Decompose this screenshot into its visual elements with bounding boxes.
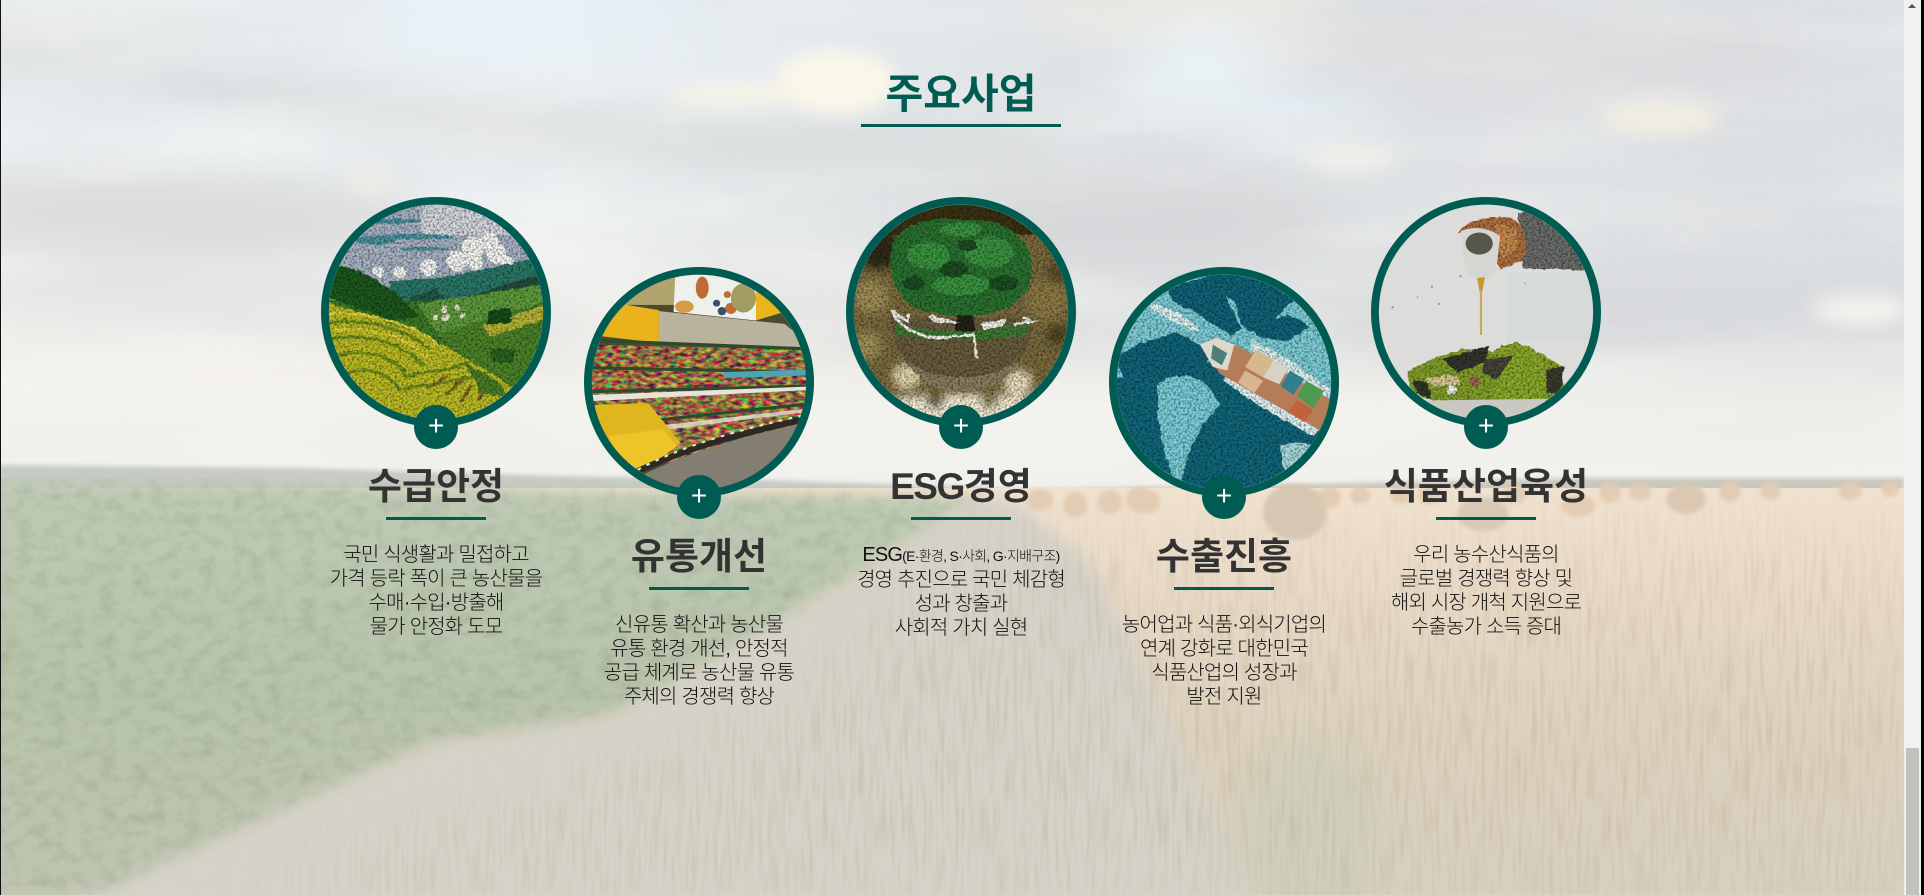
text block: 연계 강화로 대한민국 (1140, 638, 1308, 660)
text block: 글로벌 경쟁력 향상 및 (1400, 568, 1572, 590)
shelves (584, 345, 814, 464)
panel: 수급안정 (321, 197, 551, 638)
title (861, 71, 1061, 127)
icon: plus button: + (1216, 480, 1232, 511)
heading: 유통개선: 유통개선 (631, 536, 767, 577)
distant treeline (0, 465, 1100, 500)
heading: 식품산업육성: 식품산업육성 (1384, 466, 1588, 507)
icon: plus button (1202, 475, 1246, 519)
text block: 발전 지원 (1186, 686, 1262, 708)
icon: plus button (1464, 405, 1508, 449)
icon: plus button: + (428, 410, 444, 441)
text block: 경영 추진으로 국민 체감형 (857, 569, 1065, 591)
text block: 식품산업의 성장과 (1151, 662, 1297, 684)
ground (0, 488, 1904, 895)
text block (604, 614, 794, 708)
icon: tree on earth sphere photo (846, 197, 1076, 425)
text block: 수매·수입·방출해 (369, 592, 503, 614)
text block (1391, 544, 1581, 638)
text block: 공급 체계로 농산물 유통 (604, 662, 794, 684)
text block: 가격 등락 폭이 큰 농산물을 (330, 568, 542, 590)
icon: salad with oil pouring photo (1371, 197, 1601, 425)
text block: 우리 농수산식품의 (1413, 544, 1559, 566)
heading: 수급안정: 수급안정 (368, 466, 504, 507)
panel: 식품산업육성 (1371, 197, 1601, 638)
icon: container ship over world map photo (1109, 267, 1339, 495)
text block: 수출농가 소득 증대 (1411, 616, 1561, 638)
text block (330, 544, 542, 638)
title: 주요사업 (886, 71, 1036, 117)
heading: ESG경영: ESG경영 (890, 466, 1032, 507)
text block: 주체의 경쟁력 향상 (624, 686, 774, 708)
text block: 해외 시장 개척 지원으로 (1391, 592, 1581, 614)
hay bales (1027, 481, 1899, 540)
heading: 수출진흥: 수출진흥 (1156, 536, 1292, 577)
icon: plus button (677, 475, 721, 519)
panel: ESG경영 (846, 197, 1076, 639)
panel: 유통개선 (584, 267, 814, 708)
icon: plus button (939, 405, 983, 449)
text block (1122, 614, 1326, 708)
text block: 사회적 가치 실현 (895, 617, 1027, 639)
text block: 유통 환경 개선, 안정적 (610, 638, 788, 660)
icon: plus button: + (953, 410, 969, 441)
icon: plus button: + (691, 480, 707, 511)
text block: 물가 안정화 도모 (370, 616, 502, 638)
text block: 신유통 확산과 농산물 (615, 614, 783, 636)
icon: plus button: + (1478, 410, 1494, 441)
icon: terraced rice fields photo (321, 197, 551, 425)
text block: ESG(E·환경, S·사회, G·지배구조) (862, 544, 1060, 566)
page edge line (0, 0, 1, 895)
text block: 국민 식생활과 밀접하고 (343, 544, 529, 566)
icon: plus button (414, 405, 458, 449)
scrollbar (1904, 0, 1921, 895)
icon: supermarket shelves photo (584, 267, 814, 495)
text block: 농어업과 식품·외식기업의 (1122, 614, 1326, 636)
panel: 수출진흥 (1109, 267, 1339, 708)
text block: 성과 창출과 (915, 593, 1007, 615)
text block (857, 544, 1065, 639)
